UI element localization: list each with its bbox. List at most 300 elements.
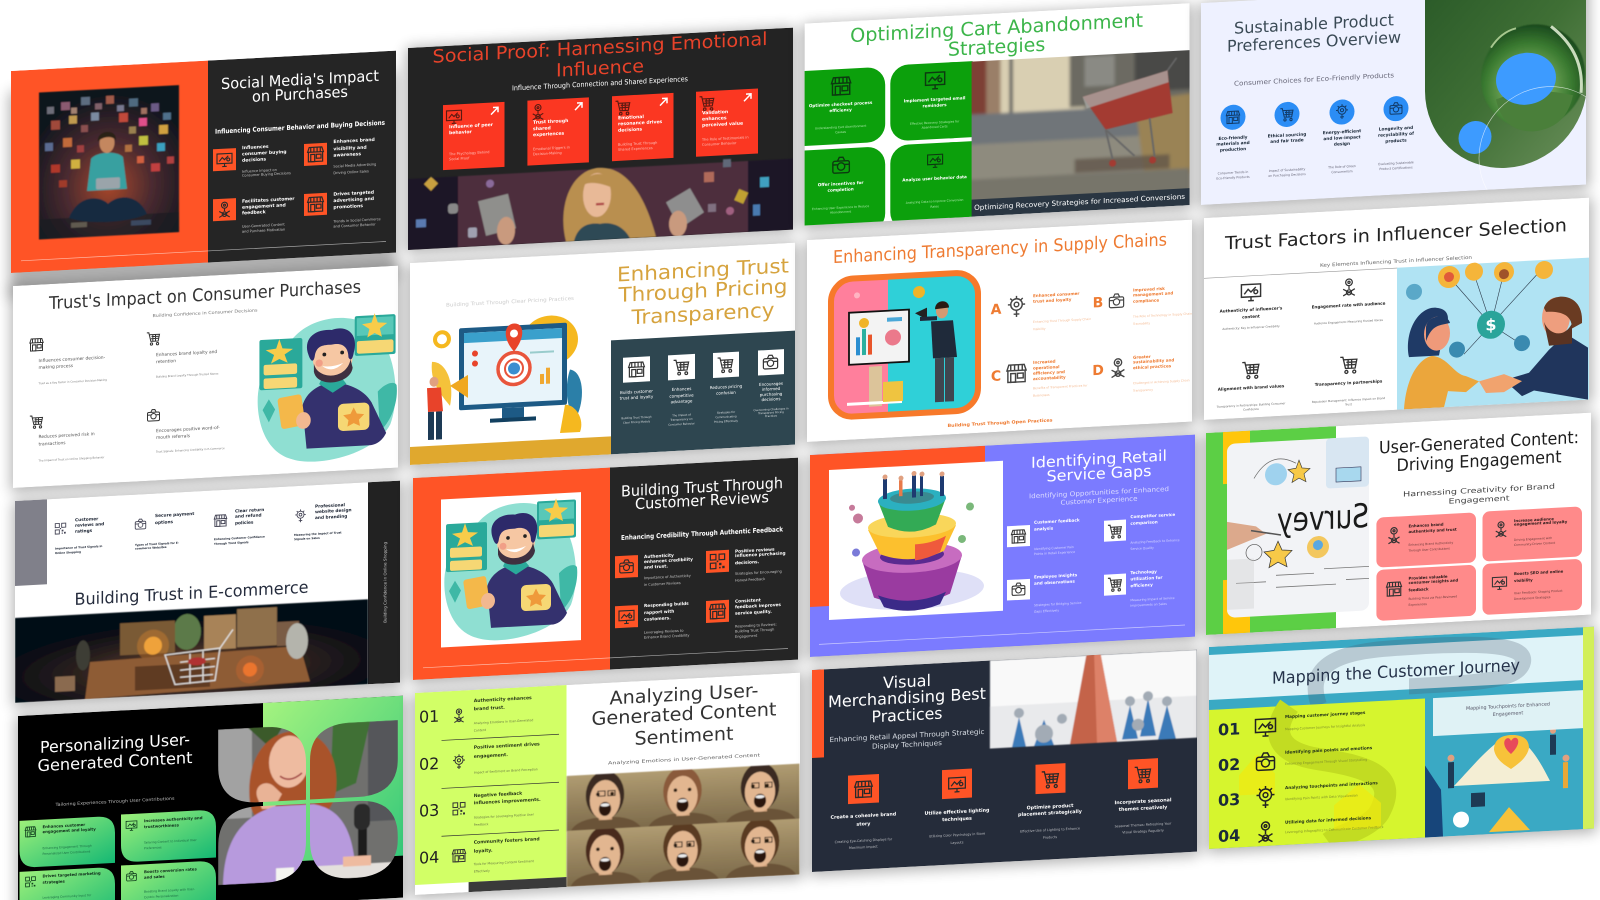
gap analysis text: Points in Retail Experience (1034, 550, 1075, 556)
green cards: Analyze user behavior data (902, 174, 967, 183)
dark benefits panel: decisions (761, 396, 781, 402)
pink cards: Provides valuable (1408, 574, 1448, 581)
cards: decisions (618, 126, 642, 134)
cards: Shared Experiences (618, 146, 653, 152)
factors text: Reputation Management: Influence Impact on Brand (1312, 396, 1385, 404)
subtitle (1029, 485, 1169, 508)
benefit text grid: Facilitates customer (242, 196, 295, 205)
panel: Building Trust Through Customer Reviews (411, 458, 801, 684)
cards: The Psychology Behind (448, 150, 490, 156)
panel: Sustainable Product Preferences (1199, 0, 1600, 241)
numbered list: Authenticity enhances (474, 695, 532, 704)
supply chain text: Transparency (1132, 388, 1153, 393)
supply chain text: trust and loyalty (1033, 297, 1072, 304)
illustration: handshake with dollar coin (1397, 257, 1590, 410)
green cards: efficiency (829, 107, 852, 113)
icons (1241, 279, 1357, 379)
lime list panel: Utilizing data for informed decisions (1285, 815, 1372, 825)
cards: Consumer Behavior (702, 141, 737, 147)
photo: woman with tablets and floating icons (408, 156, 793, 251)
photo: grid of emotional faces (566, 761, 800, 887)
factors text: Transparency in Partnerships: Building Consumer (1216, 401, 1286, 409)
benefit text grid: promotions (333, 203, 363, 211)
benefit text grid (242, 137, 381, 234)
title: Practices (871, 704, 942, 726)
green cards: completion (827, 186, 854, 193)
benefit text grid: Trends in Social Commerce (332, 217, 381, 224)
dark benefits panel: Pricing Effectively (714, 419, 738, 424)
cards: enhances (702, 115, 727, 123)
title: Through Pricing (617, 274, 788, 307)
cards: Influence of peer (449, 122, 494, 130)
lime list panel: Identifying pain points and emotions (1285, 745, 1373, 755)
dark benefits panel: competitive (669, 392, 694, 399)
title: Sentiment (634, 724, 733, 750)
pink cards: Driving Engagement with (1514, 536, 1552, 542)
pink cards: Experiences (1408, 602, 1427, 607)
benefit text grid: and Consumer Behavior (333, 222, 376, 229)
benefit text grid: Influences (242, 144, 269, 151)
title (1228, 14, 1400, 52)
benefit text grid: Responding builds (644, 601, 689, 609)
numbered list: 01 (419, 707, 439, 727)
title: Generated Content (591, 699, 776, 730)
panel: Identifying Retail Service Gaps (808, 435, 1198, 661)
lime list panel (1209, 699, 1425, 849)
panel: Trust Factors in Influencer Selection (1202, 198, 1592, 424)
gap analysis text: efficiency (1130, 582, 1153, 588)
panel: Optimizing Cart Abandonment (785, 3, 1195, 237)
caption bar: Optimizing Recovery Strategies for Increased Conversions (974, 193, 1185, 212)
trust signal text: commerce Websites (135, 545, 167, 551)
tips text: Incorporate seasonal (1114, 797, 1172, 806)
dark benefits panel: Enhances (672, 386, 691, 392)
green cards: Tailoring Content to Individual User (143, 838, 197, 845)
title: Enhancing Transparency in Supply Chains (833, 230, 1167, 268)
benefits text (38, 348, 225, 463)
choices text: Consumer Trends in (1218, 170, 1248, 176)
letters: B (1093, 295, 1103, 312)
tips text: placement strategically (1018, 809, 1083, 818)
supply chain text: Greater (1133, 354, 1151, 360)
vertical strip with side text (368, 481, 400, 684)
gap analysis text: comparison (1130, 519, 1158, 526)
dark benefits panel: Strategies for (717, 410, 736, 415)
benefits text: making process (38, 363, 74, 371)
benefit text grid: Enhances brand (333, 137, 375, 145)
numbered list: Tools for Measuring Content Sentiment (473, 859, 535, 866)
vertical strip with side text: Building Confidence in Online Shopping (383, 541, 387, 623)
green cards: strategies (42, 879, 65, 885)
lime list panel: Enhancing Engagement Through Visual Storytelling (1285, 758, 1367, 766)
green cards: Abandoned Carts (922, 124, 948, 130)
green cards: and sales (144, 874, 165, 880)
pink cards: Development Strategies (1514, 595, 1551, 601)
pink cards: Through User Contributions (1408, 546, 1450, 553)
title (621, 474, 783, 514)
title: Optimizing Cart Abandonment (850, 10, 1143, 47)
title (618, 258, 788, 326)
choices text: Ethical sourcing (1268, 132, 1306, 140)
factors text: Authenticity: Key to Influencer Credibility (1222, 324, 1280, 331)
subtitle: Consumer Choices for Eco-Friendly Products (1234, 71, 1395, 88)
benefit text grid: rapport with (644, 609, 674, 616)
lime list panel: Leveraging Infographics to Communicate Customer Feedback (1285, 825, 1384, 834)
numbered list: Negative feedback (474, 791, 523, 799)
subtitle: Enhancing Retail Appeal Through Strategic (830, 728, 985, 744)
benefit text grid: engagement and (242, 202, 286, 211)
cards: Decision-Making (533, 151, 562, 156)
touchpoints callout (1433, 690, 1583, 736)
benefit text grid: Consumer Buying Decisions (242, 171, 291, 178)
benefits text: Trust Signals: Enhancing Credibility in E-Commerce (155, 446, 225, 454)
benefits text: Trust as a Key Factor in Consumer Decision-Making (38, 378, 107, 385)
benefit text grid: Driving Online Sales (333, 169, 369, 175)
dark benefits panel: Transparency on (669, 417, 693, 422)
benefit text grid: Engagement (735, 634, 758, 639)
illustration: presenter with chart (831, 272, 978, 418)
cards: Building Trust Through (618, 141, 657, 147)
cards: Social Proof (449, 156, 470, 161)
numbered list: Positive sentiment drives (474, 741, 540, 751)
choices text: Eco-Friendly Products (1216, 175, 1250, 181)
title: Generated Content (38, 748, 193, 775)
icon circles (1220, 96, 1408, 131)
benefit text grid: Importance of Authenticity (644, 574, 691, 580)
panel: Personalizing User-Generated Content (16, 695, 406, 900)
cards: Trust through (533, 118, 568, 126)
tips text: Utilizing Color Psychology in Store (929, 832, 985, 839)
pink cards: consumer insights and (1408, 578, 1458, 585)
gap analysis text: Strategies for Bridging Service (1034, 601, 1081, 607)
benefit text grid: Leveraging Reviews to (644, 629, 684, 635)
choices text: on Purchasing Decisions (1268, 172, 1306, 178)
choices text: and fair trade (1270, 137, 1304, 145)
numbered list: Strategies for Leveraging Positive User (474, 812, 535, 820)
subtitle: Building Confidence in Consumer Decisions (152, 308, 258, 318)
factors text (1216, 300, 1386, 413)
lime list panel: Mapping Customer Journeys for Insightful Analysis (1285, 723, 1366, 731)
dark benefits panel: confusion (716, 390, 736, 396)
gap analysis text: Customer feedback (1034, 517, 1080, 525)
tips text: Products (1043, 835, 1057, 840)
choices text: materials and (1216, 140, 1250, 148)
benefit text grid: enhances credibility (644, 557, 693, 565)
green cards: Understanding Cart Abandonment (815, 124, 867, 130)
benefit text grid: Honest Feedback (735, 577, 766, 583)
pink cards: User Feedback: Shaping Product (1514, 589, 1563, 595)
benefit text grid: Strategies for Encouraging (735, 569, 782, 576)
subtitle: Identifying Opportunities for Enhanced (1029, 485, 1169, 500)
pink cards: authenticity and trust (1408, 527, 1457, 534)
benefit text grid: User-Generated Content (242, 222, 285, 229)
title: Analyzing User- (609, 681, 758, 709)
green cards: Boosts conversion rates (144, 866, 197, 874)
subtitle: Enhancing Credibility Through Authentic Feedback (621, 525, 784, 542)
green cards (20, 810, 216, 900)
subtitle: Engagement (1448, 493, 1510, 506)
title (592, 680, 776, 752)
benefits text: mouth referrals (156, 433, 191, 441)
green cards: Personalized User Contributions (42, 849, 91, 856)
tips text: Utilize effective lighting (925, 807, 990, 817)
gap analysis text: Technology (1130, 569, 1157, 575)
benefit text grid: feedback improves (735, 602, 781, 610)
factors text: Engagement rate with audience (1312, 301, 1386, 309)
pink cards: Enhancing Brand Authenticity (1408, 541, 1453, 547)
green cards: Abandonment (830, 209, 852, 215)
dark benefits panel: The Impact of (671, 413, 691, 418)
dark benefits panel: Communicating (715, 414, 737, 419)
trust signal text: Enhancing Customer Confidence (214, 535, 265, 541)
factors text: Trust (1344, 402, 1353, 407)
dark benefits panel: Practices (765, 414, 778, 418)
trust signal text: Clear return (235, 507, 264, 515)
supply chain text: Challenges in Achieving Supply Chain (1133, 378, 1190, 385)
choices text: production (1220, 146, 1246, 154)
benefit text grid: Responding to Reviews: (735, 622, 777, 629)
subtitle: Building Trust Through Clear Pricing Practices (446, 296, 574, 309)
letters: C (991, 368, 1001, 385)
panel: Mapping the Customer Journey (1207, 626, 1597, 853)
cards (443, 88, 758, 170)
dark benefits panel: Clear Pricing Models (623, 419, 651, 425)
cards: The Role of Testimonials in (701, 135, 749, 142)
title: Preferences Overview (1227, 28, 1401, 56)
numbered list: loyalty. (474, 848, 493, 855)
benefit text grid: in Customer Reviews (644, 581, 681, 587)
illustration: mountain with heart and people (1425, 727, 1570, 838)
gap analysis text: Employee insights (1034, 572, 1078, 580)
gap analysis text (1034, 512, 1180, 614)
tips text: Layouts (951, 840, 964, 845)
green cards: Offer incentives for (818, 180, 864, 187)
supply chain text: efficiency and (1033, 369, 1065, 376)
benefits text: Influences consumer decision- (38, 355, 106, 364)
pink cards: Enhances brand (1408, 522, 1444, 528)
benefits text: Building Brand Loyalty Through Trusted Stores (156, 371, 219, 379)
pink cards: visibility (1514, 577, 1533, 583)
green cards: engagement and loyalty (42, 826, 96, 834)
numbered list (419, 694, 559, 876)
benefit text grid: awareness (333, 151, 361, 159)
choices text: recyclability of (1378, 131, 1414, 139)
dark benefits panel: Builds customer (620, 388, 653, 395)
green cards: Causes (835, 130, 846, 134)
title (1031, 447, 1167, 486)
trust signal text: options (155, 519, 174, 526)
trust signal text: reviews and (75, 521, 104, 529)
icon tiles (213, 143, 327, 221)
subtitle: Key Elements Influencing Trust in Influencer Selection (1320, 255, 1472, 269)
cards: behavior (449, 129, 472, 136)
numbered list: brand trust. (474, 705, 505, 712)
icon tiles (615, 550, 729, 628)
numbered list: influences improvements. (474, 797, 541, 806)
benefit text grid: decisions (242, 156, 266, 164)
lime list panel: 02 (1218, 755, 1240, 775)
choices text: design (1334, 141, 1350, 148)
panel: Enhancing Transparency in Supply Chains (805, 220, 1195, 446)
trust signal text: Measuring the Impact of Trust (294, 530, 342, 537)
factors text: Transparency in partnerships (1315, 378, 1383, 387)
factors text: content (1242, 314, 1260, 319)
title: Merchandising Best (828, 684, 986, 711)
gap analysis text: Competitor service (1130, 512, 1175, 519)
panel: Trust's Impact on Consumer Purchases (11, 266, 401, 492)
photo: cone and blue pawns (990, 646, 1197, 749)
benefits text: retention (156, 358, 176, 365)
subtitle (1403, 482, 1555, 508)
trust signal text: Through Trust Signals (214, 540, 249, 546)
trust signal text: ratings (75, 528, 93, 535)
numbered list: Content (474, 728, 487, 733)
subtitle: Tailoring Experiences Through User Contributions (54, 796, 175, 808)
title: Building Trust in E-commerce (74, 578, 308, 609)
benefit text grid: decisions. (735, 559, 760, 566)
photo: man surrounded by social media icons (39, 85, 179, 240)
title: Mapping the Customer Journey (1272, 656, 1520, 688)
title: Identifying Retail (1031, 447, 1167, 472)
panel: Visual Merchandising Best Practices (810, 646, 1200, 876)
lime list panel: Identifying Pain Points with Data Visualization (1285, 793, 1358, 801)
benefit text grid: advertising and (333, 196, 374, 204)
gap analysis text: Identifying Customer Pain (1034, 545, 1074, 551)
choices text: Longevity and (1379, 125, 1413, 133)
panel: Building Trust in E-commerce (13, 481, 403, 707)
icon tiles (848, 758, 1158, 804)
pink cards: Increase audience (1514, 516, 1554, 523)
choices text: products (1385, 138, 1407, 145)
benefit text grid (644, 546, 786, 644)
benefit text grid: customers. (644, 615, 671, 623)
cards: Emotional (618, 114, 644, 121)
benefit text grid: consumer buying (242, 149, 287, 157)
dark benefits panel (611, 331, 795, 454)
pink cards: Boosts SEO and online (1514, 569, 1564, 576)
supply chain text: Enhancing Trust Through Supply Chain (1033, 317, 1091, 324)
letters: A (991, 302, 1002, 318)
photo: hand writing on survey sheet (1227, 436, 1369, 618)
green cards: Effective Recovery Strategies for (910, 119, 960, 126)
choices text: Eco-friendly (1219, 134, 1248, 142)
lime list panel: 01 (1218, 719, 1240, 740)
title: Building Trust Through (621, 474, 783, 501)
title: Visual (883, 671, 931, 692)
subtitle: Analyzing Emotions in User-Generated Content (608, 752, 760, 767)
cards: perceived value (702, 121, 743, 129)
green cards: Rates (930, 204, 939, 209)
benefit text grid: Consistent (735, 597, 761, 605)
choices text: and low-impact (1323, 134, 1361, 142)
title: Personalizing User- (40, 730, 190, 757)
green cards: trustworthiness (144, 822, 180, 829)
title (1379, 428, 1579, 477)
numbered list: Analyzing Emotions in User-Generated (474, 718, 533, 725)
trust signal text: Secure payment (155, 511, 194, 519)
benefit text grid: Influence Impact on (242, 168, 277, 174)
choices text: The Role of Green (1327, 164, 1356, 170)
green cards: Enhancing Engagement Through (42, 844, 92, 850)
choices text: Evaluating Sustainable (1378, 160, 1414, 166)
icons (55, 509, 306, 535)
title: Enhancing Trust (617, 253, 789, 287)
factors text: Alignment with brand values (1218, 383, 1285, 392)
pink cards: engagement and loyalty (1514, 519, 1568, 527)
supply chain text: ethical practices (1133, 363, 1172, 370)
benefit text grid: service quality. (735, 609, 772, 617)
trust signal text: Professional (315, 502, 345, 510)
benefits text: Reduces perceived risk in (38, 431, 95, 440)
choices text: Consumerism (1331, 169, 1353, 174)
title (222, 70, 379, 102)
panel: Enhancing Trust Through Pricing Transparency (408, 243, 798, 469)
supply chain text: management and (1133, 290, 1173, 298)
cards: experiences (533, 131, 565, 138)
pink cards: Building Trust via Peer-Reviewed (1408, 594, 1457, 601)
benefit text grid: feedback (242, 209, 267, 216)
factors text: Audience Engagement: Measuring Trusted Voices (1314, 318, 1384, 326)
supply chain text: compliance (1133, 297, 1159, 304)
title: Driving Engagement (1396, 447, 1562, 476)
title (828, 668, 986, 729)
benefit text grid: and trust. (644, 563, 668, 571)
factors text: Authenticity of influencer's (1220, 305, 1283, 314)
green cards: Enhances customer (42, 822, 85, 829)
benefit text grid: Enhance Brand Credibility (644, 633, 689, 640)
benefits text: transactions (38, 440, 66, 448)
dark benefits panel: Reduces pricing (710, 383, 743, 390)
benefits text: Encourages positive word-of- (156, 425, 220, 434)
illustration: man with review cards (258, 312, 397, 465)
numbered list: 03 (419, 801, 439, 821)
title: Service Gaps (1046, 462, 1152, 485)
green cards (804, 61, 973, 226)
icons (1007, 290, 1124, 383)
green cards: Optimize checkout process (809, 100, 873, 108)
illustration: handshake with dollar coin: $ (1485, 315, 1497, 335)
icons (30, 332, 160, 429)
gap analysis text: Improvements on Sales (1130, 602, 1167, 608)
title: Strategies (948, 34, 1045, 61)
benefit text grid: and Purchase Motivation (242, 227, 285, 234)
benefit text grid: Social Media Advertising (333, 162, 376, 169)
touchpoints callout: Mapping Touchpoints for Enhanced (1466, 701, 1550, 712)
trust signal text: and branding (315, 513, 347, 521)
benefit text grid: Authenticity (644, 553, 674, 560)
supply chain text: Benefits of Transparent Practices for (1033, 383, 1088, 390)
trust signal text: policies (235, 520, 254, 527)
choices text: Product Certifications (1379, 165, 1413, 171)
title (38, 730, 193, 775)
numbered list: 02 (419, 754, 439, 774)
supply chain text: sustainability and (1133, 357, 1174, 365)
benefit text grid: Building Trust Through (735, 628, 774, 634)
green cards: Leveraging Community Input for (42, 893, 92, 900)
dark benefits panel: Transparent Pricing (757, 410, 784, 415)
panel: Social Media's Impact on Purchases (9, 51, 397, 298)
green cards: Analyzing Data to Improve Conversion (906, 198, 964, 205)
photo: woman in lilac blouse in petal frame (218, 720, 398, 885)
green cards: Enhancing User Experience to Reduce (812, 204, 869, 211)
letters: D (1092, 363, 1104, 379)
green cards: Preferences (144, 845, 162, 850)
illustration: monitor with target (427, 314, 582, 440)
green cards: Drives targeted marketing (42, 870, 101, 878)
supply chain text: The Role of Technology in Supply Chain (1132, 312, 1192, 319)
touchpoints callout: Engagement (1493, 710, 1523, 718)
dark benefits panel: Encourages (759, 381, 783, 387)
